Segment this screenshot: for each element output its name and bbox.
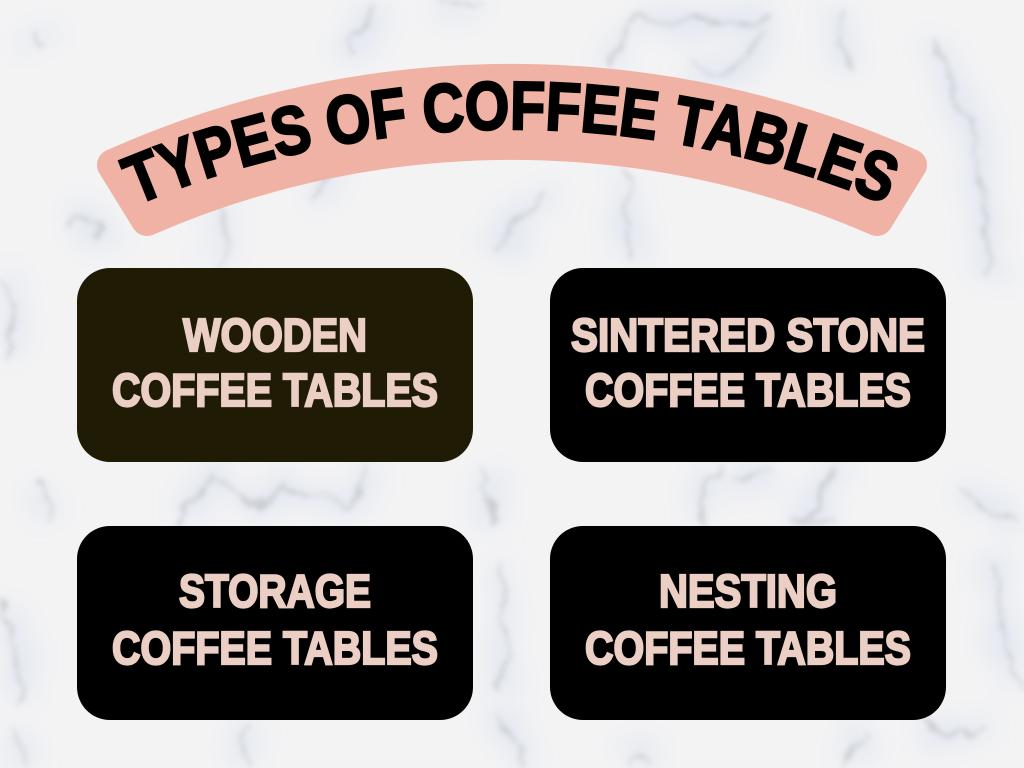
panel: sintered stone coffee tables: [550, 268, 946, 462]
panel: nesting coffee tables: [550, 526, 946, 720]
panel: storage coffee tables: [77, 526, 473, 720]
label: coffee tables: COFFEE TABLES: [585, 622, 911, 674]
banner shape: [113, 80, 911, 220]
label: wooden: WOODEN: [183, 309, 367, 361]
label: coffee tables: COFFEE TABLES: [585, 364, 911, 416]
panel: wooden coffee tables: [77, 268, 473, 462]
title banner: [97, 64, 927, 236]
label: sintered stone: SINTERED STONE: [571, 309, 925, 361]
title: TYPES OF COFFEE TABLES: [118, 80, 898, 202]
label: nesting: NESTING: [659, 565, 837, 617]
label: coffee tables: COFFEE TABLES: [112, 364, 438, 416]
label: storage: STORAGE: [179, 565, 371, 617]
label: coffee tables: COFFEE TABLES: [112, 622, 438, 674]
